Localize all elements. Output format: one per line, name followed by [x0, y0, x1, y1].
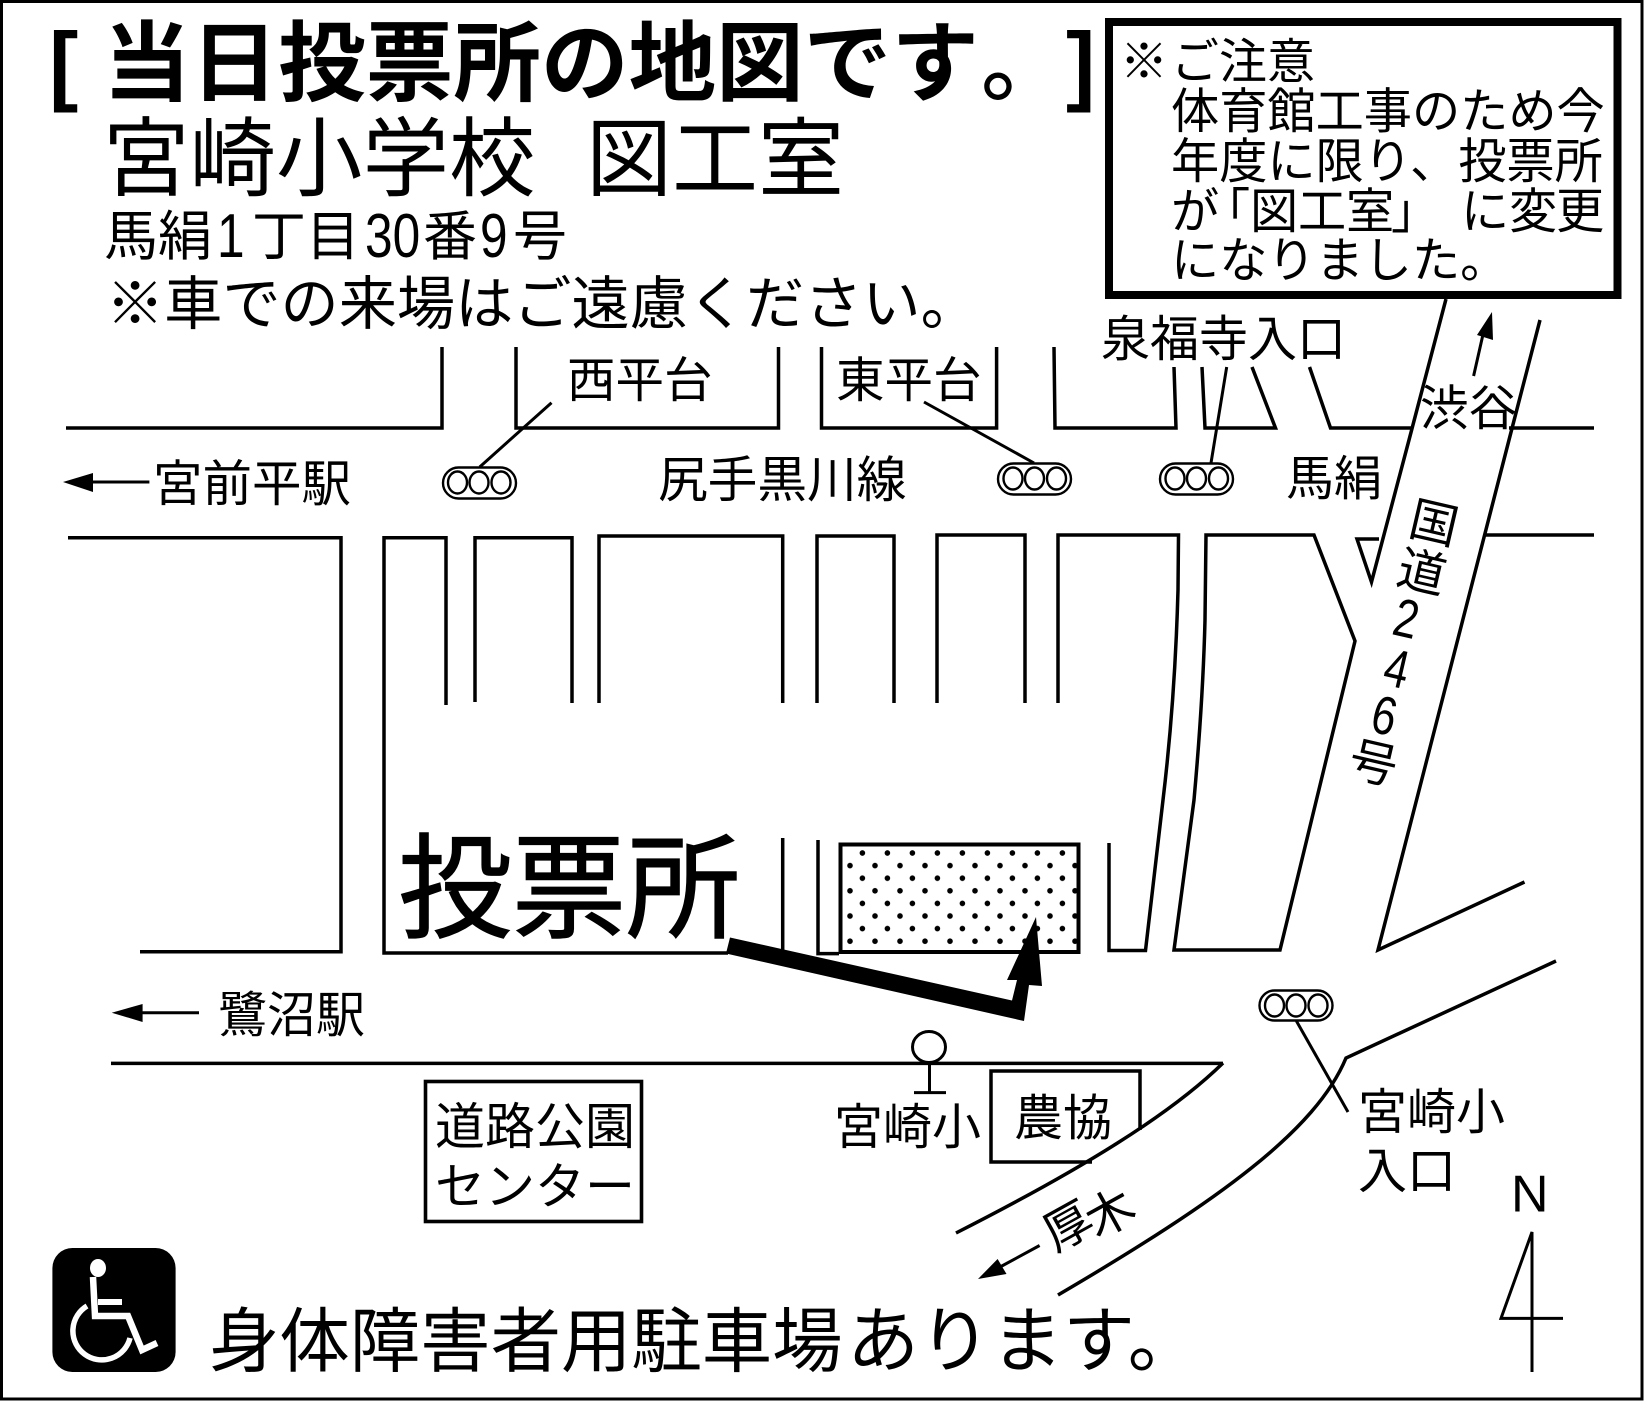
label: 国道246号 along road: 6 — [1366, 685, 1403, 748]
traffic light 2 — [924, 402, 1071, 494]
box: 道路公園センター: 道路公園 — [435, 1099, 635, 1155]
heading: venue name: 図工室 — [586, 112, 844, 208]
address: 30 — [365, 201, 420, 270]
address: 9 — [480, 201, 508, 270]
label: 尻手黒川線: 尻手黒川線 — [658, 452, 906, 508]
label: 厚木 with arrow — [978, 1179, 1145, 1279]
callout: caution box: 年度に限り、投票所 — [1171, 135, 1603, 189]
traffic light 3 — [1160, 367, 1233, 494]
address: 号 — [513, 207, 567, 267]
building: polling station (dotted) — [840, 844, 1078, 952]
address: 1 — [217, 201, 245, 270]
label: 渋谷: 渋谷 — [1420, 382, 1517, 436]
box: 道路公園センター — [426, 1082, 642, 1222]
callout: caution box — [1109, 22, 1618, 295]
callout: caution box: 体育館工事のため今 — [1171, 85, 1605, 139]
box: 道路公園センター: センター — [435, 1159, 635, 1215]
label: 宮前平駅 with arrow — [63, 457, 351, 512]
callout: caution box: が「図工室」に変更 — [1171, 185, 1604, 239]
icon: wheelchair — [52, 1248, 176, 1372]
label: 国道246号 along road — [1344, 493, 1463, 796]
title: [ — [49, 14, 78, 113]
box: 農協: 農協 — [1014, 1092, 1112, 1146]
road: route 246 — [1357, 299, 1594, 950]
heading: venue name — [103, 112, 844, 208]
address — [104, 201, 567, 270]
label: 東平台: 東平台 — [836, 354, 982, 408]
label: accessible parking note — [209, 1302, 1200, 1382]
label: 国道246号 along road: 4 — [1378, 638, 1415, 701]
label: 鷺沼駅 with arrow: 鷺沼駅 — [218, 989, 365, 1043]
label: 国道246号 along road: 号 — [1344, 733, 1403, 796]
road: upper block outlines — [66, 347, 1594, 428]
title: 当日投票所の地図です — [103, 15, 979, 113]
label: 国道246号 along road: 2 — [1388, 588, 1425, 651]
label: 西平台: 西平台 — [567, 354, 713, 408]
label: 厚木 with arrow: 厚 — [1035, 1192, 1103, 1262]
traffic light 1 — [443, 403, 552, 498]
icon: bus stop — [912, 1032, 946, 1093]
heading: polling place label: 投票所 — [398, 827, 740, 954]
label: 宮前平駅 with arrow: 宮前平駅 — [153, 457, 351, 512]
road: lower south road — [111, 961, 1556, 1295]
callout: caution box: になりました。 — [1171, 234, 1508, 288]
label: accessible parking note: 身体障害者用駐車場 — [209, 1302, 843, 1381]
label: 国道246号 along road: 道 — [1392, 542, 1451, 605]
icon: north arrow — [1501, 1166, 1563, 1372]
no car notice: ※車での来場はご遠慮ください。 — [106, 272, 979, 337]
label: accessible parking note: あります。 — [847, 1302, 1200, 1382]
arrow: route to polling place — [726, 917, 1042, 1021]
road: middle block outlines — [68, 535, 1355, 954]
label: 宮崎小入口 — [1358, 1086, 1505, 1199]
arrow: toward 渋谷 — [1474, 312, 1493, 376]
icon: north arrow: N — [1511, 1166, 1549, 1224]
label: 厚木 with arrow: 木 — [1077, 1179, 1145, 1249]
box: 農協 — [991, 1071, 1140, 1162]
address: 丁目 — [252, 207, 360, 267]
label: 泉福寺入口: 泉福寺入口 — [1101, 313, 1346, 367]
heading: venue name: 宮崎小学校 — [103, 112, 536, 208]
traffic light 4 — [1260, 990, 1348, 1112]
label: 鷺沼駅 with arrow — [112, 989, 365, 1043]
callout: caution box: ※ご注意 — [1120, 36, 1315, 89]
title: 。 — [981, 15, 1069, 113]
label: 宮崎小入口: 宮崎小 — [1358, 1086, 1505, 1140]
label: 宮崎小 bus stop: 宮崎小 — [834, 1101, 981, 1155]
label: 宮崎小入口: 入口 — [1358, 1145, 1456, 1199]
label: 国道246号 along road: 国 — [1404, 493, 1463, 556]
address: 番 — [423, 207, 477, 267]
address: 馬絹 — [104, 207, 212, 267]
title: ] — [1066, 14, 1095, 113]
label: 馬絹: 馬絹 — [1286, 453, 1382, 506]
